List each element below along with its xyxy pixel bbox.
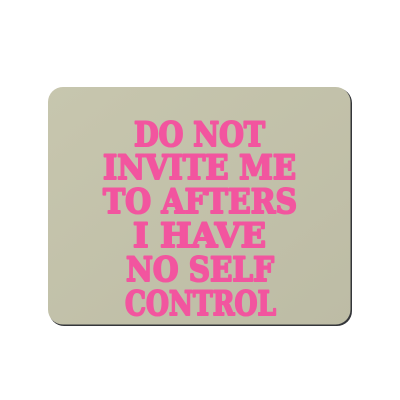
slogan text [103,115,297,324]
line: I HAVE: I HAVE [133,216,266,256]
line: NO SELF: NO SELF [126,250,274,290]
pad surface [48,87,350,324]
line: INVITE ME: INVITE ME [103,148,296,188]
line: DO NOT: DO NOT [134,115,265,155]
line: CONTROL: CONTROL [125,284,276,324]
pad edge shadow [49,88,352,326]
line: TO AFTERS: TO AFTERS [103,182,297,222]
